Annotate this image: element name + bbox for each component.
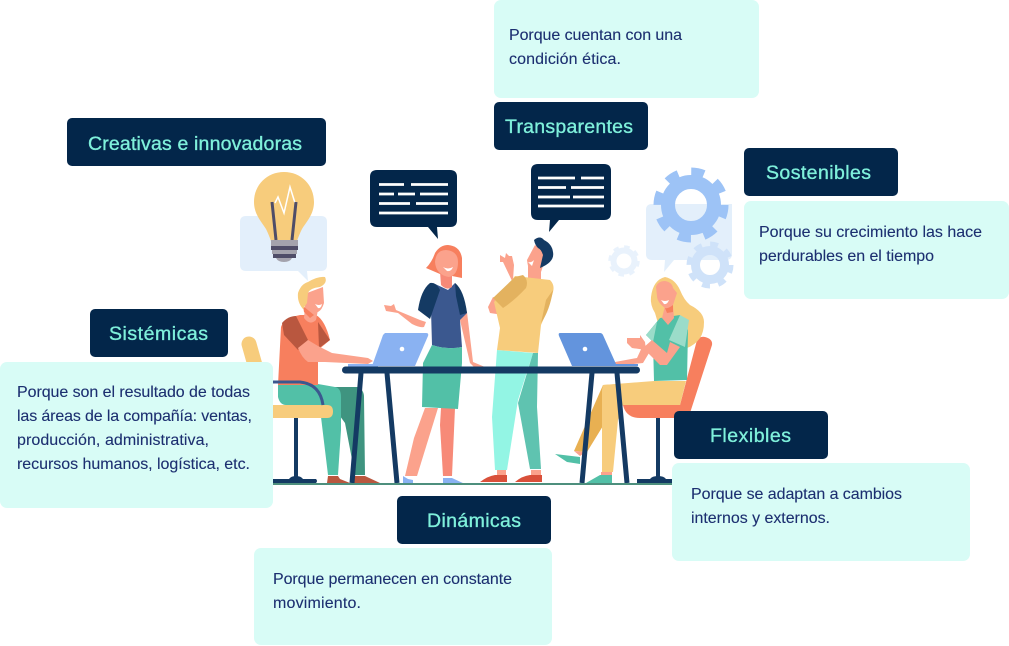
person: woman standing (384, 245, 485, 484)
icon: speech bubble left (370, 170, 457, 239)
panel: Dinámicas description: movimiento. (273, 595, 361, 612)
heading: Sostenibles (744, 148, 898, 196)
chair right (623, 337, 712, 483)
heading: Creativas e innovadoras: Creativas e innovadoras (88, 133, 302, 155)
chair left (249, 344, 333, 483)
panel: Transparentes description (494, 0, 759, 98)
person: man standing (480, 238, 554, 482)
panel: Transparentes description: Porque cuentan con una (509, 27, 682, 44)
panel: Sostenibles description (744, 201, 1009, 299)
heading: Transparentes: Transparentes (505, 116, 633, 138)
panel: Transparentes description: condición ética. (509, 51, 621, 68)
panel: Sistémicas description: recursos humanos, logística, etc. (17, 456, 250, 473)
panel: Sistémicas description: Porque son el resultado de todas (17, 384, 250, 401)
icon: light bulb in speech bubble (240, 172, 327, 281)
laptop left (348, 333, 428, 366)
heading: Sistémicas (90, 309, 228, 357)
panel: Sostenibles description: Porque su crecimiento las hace (759, 224, 982, 241)
heading: Sostenibles: Sostenibles (766, 162, 871, 184)
heading: Dinámicas: Dinámicas (427, 510, 521, 532)
panel: Sistémicas description: producción, administrativa, (17, 432, 209, 449)
panel: Dinámicas description: Porque permanecen en constante (273, 571, 512, 588)
panel: Flexibles description: Porque se adaptan a cambios (691, 486, 902, 503)
icon: speech bubble right (531, 164, 611, 232)
panel: Dinámicas description (254, 548, 552, 645)
panel: Flexibles description: internos y externos. (691, 510, 830, 527)
heading: Flexibles: Flexibles (710, 425, 791, 447)
heading: Creativas e innovadoras (67, 118, 326, 166)
panel: Flexibles description (672, 463, 970, 561)
panel: Sistémicas description (0, 362, 273, 508)
person: woman seated right (555, 277, 704, 483)
icon: gears in speech bubble (610, 172, 732, 286)
laptop right (559, 333, 638, 366)
heading: Sistémicas: Sistémicas (109, 323, 208, 345)
illustration: team around table (240, 164, 732, 485)
person: man seated left (278, 277, 380, 483)
panel: Sostenibles description: perdurables en el tiempo (759, 248, 934, 265)
table (273, 366, 673, 485)
heading: Dinámicas (397, 496, 551, 544)
heading: Flexibles (674, 411, 828, 459)
heading: Transparentes (494, 102, 648, 150)
panel: Sistémicas description: las áreas de la compañía: ventas, (17, 408, 252, 425)
